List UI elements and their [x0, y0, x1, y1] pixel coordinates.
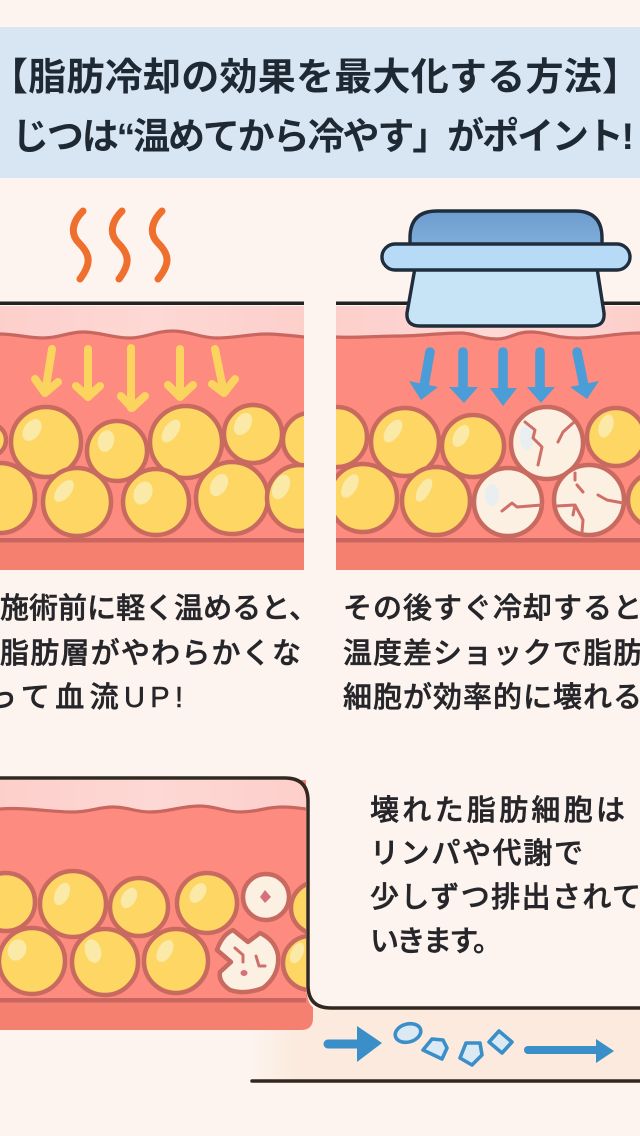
panel: excretion skin cross-section: [0, 780, 343, 1030]
title banner: [0, 27, 640, 178]
text block: cooling: その後すぐ冷却すると: [343, 592, 640, 625]
skin surface line left: [0, 302, 304, 305]
text block: cooling: [343, 592, 640, 714]
panel: warming skin cross-section: [0, 306, 337, 570]
icon: heat waves: [73, 211, 167, 279]
bottom band background: [250, 1008, 640, 1081]
arrow: lymph flow out: [528, 1039, 614, 1063]
icon: broken fat fragments: [393, 1021, 512, 1065]
text block: excretion: 壊れた脂肪細胞は: [370, 794, 625, 827]
text block: excretion: リンパや代謝で: [370, 837, 583, 870]
text block: excretion: 少しずつ排出されて: [370, 881, 640, 914]
fat cells: [0, 405, 337, 536]
warm yellow arrows: [35, 348, 235, 408]
fat cells and broken cells: [0, 871, 343, 995]
callout frame line: [0, 778, 640, 1008]
skin surface line right: [336, 302, 640, 305]
text block: warming: 施術前に軽く温めると、: [0, 592, 318, 625]
lymph vessel line: [252, 1079, 640, 1083]
text block: warming: [0, 592, 318, 714]
fat cells and cracked cells: [307, 407, 640, 536]
title line 1: 【脂肪冷却の効果を最大化する方法】: [0, 57, 640, 99]
title line 2: じつは“温めてから冷やす」がポイント!: [12, 116, 634, 157]
arrow: lymph flow in: [328, 1026, 382, 1062]
text block: excretion: いきます。: [370, 926, 502, 958]
cold blue arrows: [409, 352, 599, 406]
text block: cooling: 温度差ショックで脂肪: [343, 637, 640, 670]
panel: cooling skin cross-section: [307, 306, 640, 570]
icon: cooling device: [382, 211, 630, 326]
text block: warming: 脂肪層がやわらかくな: [0, 637, 301, 670]
text block: excretion: [370, 794, 640, 958]
text block: cooling: 細胞が効率的に壊れる: [343, 681, 640, 714]
